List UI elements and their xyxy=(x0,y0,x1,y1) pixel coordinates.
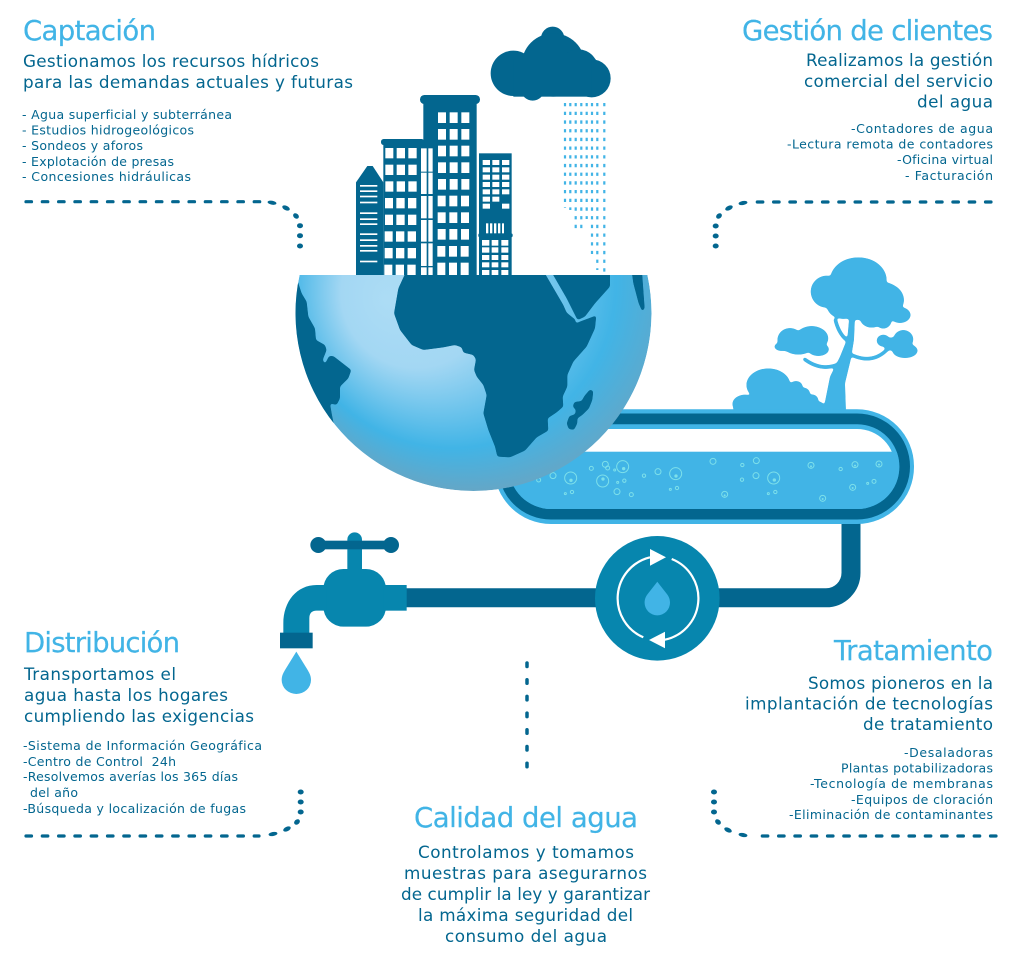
text: Tratamiento intro xyxy=(745,673,993,734)
list: Distribución items: -Sistema de Información Geográfica xyxy=(23,738,262,753)
faucet nozzle xyxy=(280,633,313,648)
list: Gestión de clientes items: -Contadores de agua xyxy=(851,121,993,136)
list: Tratamiento items: -Equipos de cloración xyxy=(851,792,993,807)
heading: Calidad del agua: Calidad del agua xyxy=(414,802,638,834)
text: Calidad del agua intro xyxy=(401,842,650,946)
continent: South America xyxy=(273,280,351,430)
water drop xyxy=(282,652,311,694)
list: Captación items: - Sondeos y aforos xyxy=(22,138,143,153)
right building xyxy=(478,153,513,276)
dotted leader: Gestión de clientes xyxy=(713,200,991,248)
icon: half globe xyxy=(296,275,652,491)
text: Distribución intro xyxy=(23,664,254,726)
icon: recycling water circle xyxy=(595,536,720,661)
heading: Captación: Captación xyxy=(23,15,156,47)
list: Tratamiento items xyxy=(789,745,993,822)
faucet body xyxy=(283,569,407,635)
text: Calidad del agua intro: Controlamos y tomamos xyxy=(418,842,634,862)
text: Gestión de clientes intro xyxy=(804,50,993,112)
text: Tratamiento intro: implantación de tecnologías xyxy=(745,694,993,714)
icon: city buildings xyxy=(356,95,513,276)
small pointed building xyxy=(356,166,383,276)
section: Tratamiento xyxy=(745,635,993,822)
list: Distribución items: del año xyxy=(30,785,78,800)
dotted leader: Distribución xyxy=(26,790,304,837)
list: Captación items xyxy=(22,107,232,184)
text: Calidad del agua intro: de cumplir la ley y garantizar xyxy=(401,884,650,904)
list: Gestión de clientes items: - Facturación xyxy=(905,168,993,183)
dotted leader: Tratamiento xyxy=(711,790,996,838)
text: Gestión de clientes intro: del agua xyxy=(917,92,993,112)
list: Captación items: - Estudios hidrogeológicos xyxy=(22,122,194,138)
pipe to the purification tank xyxy=(406,510,851,598)
text: Distribución intro: agua hasta los hogares xyxy=(24,685,228,705)
bubbles xyxy=(537,458,882,501)
dotted leader: Captación xyxy=(26,200,303,248)
text: Gestión de clientes intro: comercial del servicio xyxy=(804,71,993,91)
text: Captación intro xyxy=(23,51,353,92)
list: Captación items: - Concesiones hidráulicas xyxy=(22,169,191,184)
list: Gestión de clientes items: -Oficina virtual xyxy=(897,152,993,167)
panel: water tank xyxy=(494,409,914,524)
section: Calidad del agua xyxy=(401,802,650,946)
list: Gestión de clientes items xyxy=(787,121,993,183)
circular arrows xyxy=(618,549,698,648)
island: Madagascar xyxy=(567,389,593,430)
section: Distribución xyxy=(23,627,262,816)
list: Tratamiento items: Plantas potabilizadoras xyxy=(841,760,993,776)
section: Captación xyxy=(22,15,353,184)
continent: Asia sliver xyxy=(631,267,645,312)
list: Tratamiento items: -Desaladoras xyxy=(904,745,993,760)
text: Distribución intro: Transportamos el xyxy=(23,664,176,684)
list: Tratamiento items: -Tecnología de membranas xyxy=(810,776,993,791)
text: Distribución intro: cumpliendo las exigencias xyxy=(24,706,254,726)
tall building xyxy=(420,95,480,276)
list: Captación items: - Agua superficial y subterránea xyxy=(22,107,232,122)
windows xyxy=(360,112,509,276)
icon: faucet xyxy=(280,532,407,694)
text: Captación intro: Gestionamos los recursos hídricos xyxy=(23,51,319,71)
center water drop xyxy=(645,582,670,615)
text: Captación intro: para las demandas actuales y futuras xyxy=(23,72,353,92)
text: Tratamiento intro: de tratamiento xyxy=(863,714,993,734)
continent: Africa xyxy=(394,267,596,457)
rain xyxy=(565,103,604,275)
text: Gestión de clientes intro: Realizamos la gestión xyxy=(806,50,993,70)
list: Distribución items: -Resolvemos averías los 365 días xyxy=(23,769,238,784)
icon: cloud xyxy=(491,27,611,101)
list: Gestión de clientes items: -Lectura remota de contadores xyxy=(787,136,993,152)
text: Calidad del agua intro: consumo del agua xyxy=(445,926,607,946)
icon: tree and bush xyxy=(732,257,918,413)
heading: Distribución: Distribución xyxy=(24,627,180,659)
text: Tratamiento intro: Somos pioneros en la xyxy=(808,673,993,693)
list: Distribución items: -Búsqueda y localización de fugas xyxy=(23,801,246,816)
list: Distribución items: -Centro de Control 24h xyxy=(23,754,176,769)
section: Gestión de clientes xyxy=(742,15,993,183)
list: Tratamiento items: -Eliminación de contaminantes xyxy=(789,807,993,822)
heading: Tratamiento: Tratamiento xyxy=(833,635,993,667)
list: Captación items: - Explotación de presas xyxy=(22,154,174,169)
list: Distribución items xyxy=(23,738,262,816)
faucet handle xyxy=(310,537,399,553)
heading: Gestión de clientes: Gestión de clientes xyxy=(742,15,993,47)
left-middle building xyxy=(381,139,425,276)
dotted leader: Calidad del agua xyxy=(525,663,529,768)
faucet stem xyxy=(347,532,362,572)
text: Calidad del agua intro: muestras para asegurarnos xyxy=(404,863,647,883)
text: Calidad del agua intro: la máxima seguridad del xyxy=(418,905,633,925)
continent: Arabia xyxy=(553,275,610,322)
